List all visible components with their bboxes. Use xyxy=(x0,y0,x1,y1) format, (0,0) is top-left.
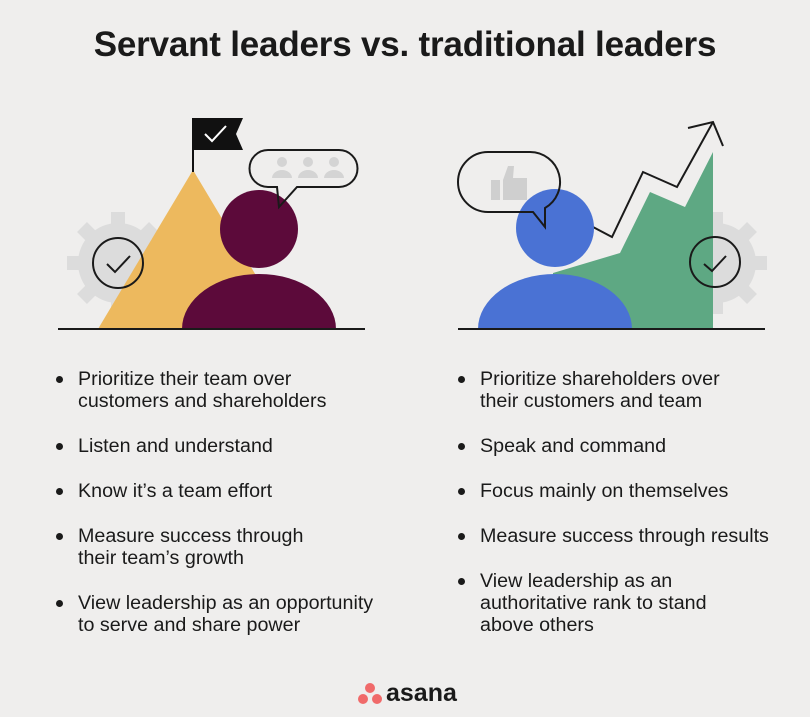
list: traditional leaders: authoritative rank to stand xyxy=(480,592,707,614)
flag xyxy=(193,118,243,172)
icon: check circle xyxy=(93,238,143,288)
list: servant leaders: Listen and understand xyxy=(78,435,273,457)
list: servant leaders xyxy=(56,368,373,636)
list: traditional leaders: above others xyxy=(480,614,594,636)
list: traditional leaders: View leadership as an xyxy=(480,570,672,592)
list: traditional leaders xyxy=(458,368,769,636)
icon: gear xyxy=(665,212,767,314)
list: servant leaders: Know it’s a team effort xyxy=(78,480,272,502)
list: servant leaders: their team’s growth xyxy=(78,547,244,569)
person: traditional leader xyxy=(478,189,632,329)
list: servant leaders: Measure success through xyxy=(78,525,303,547)
arrow up trend xyxy=(593,122,723,237)
list: servant leaders: customers and shareholders xyxy=(78,390,326,412)
list: servant leaders: Prioritize their team over xyxy=(78,368,291,390)
speech bubble with team xyxy=(250,150,358,207)
person: servant leader xyxy=(182,190,336,329)
list: traditional leaders: their customers and team xyxy=(480,390,702,412)
list: traditional leaders: Speak and command xyxy=(480,435,666,457)
logo: asana: asana xyxy=(386,679,457,707)
title: Servant leaders vs. traditional leaders xyxy=(94,25,716,64)
mountain xyxy=(98,170,288,329)
list: traditional leaders: Focus mainly on themselves xyxy=(480,480,728,502)
icon: check circle xyxy=(690,237,740,287)
growth chart area xyxy=(553,152,713,330)
list: servant leaders: View leadership as an opportunity xyxy=(78,592,373,614)
list: servant leaders: to serve and share power xyxy=(78,614,300,636)
illustration: servant leader xyxy=(58,118,365,330)
speech bubble with thumbs up xyxy=(458,152,560,227)
list: traditional leaders: Prioritize shareholders over xyxy=(480,368,720,390)
icon: gear xyxy=(67,212,169,314)
list: traditional leaders: Measure success through results xyxy=(480,525,769,547)
illustration: traditional leader xyxy=(457,120,767,330)
